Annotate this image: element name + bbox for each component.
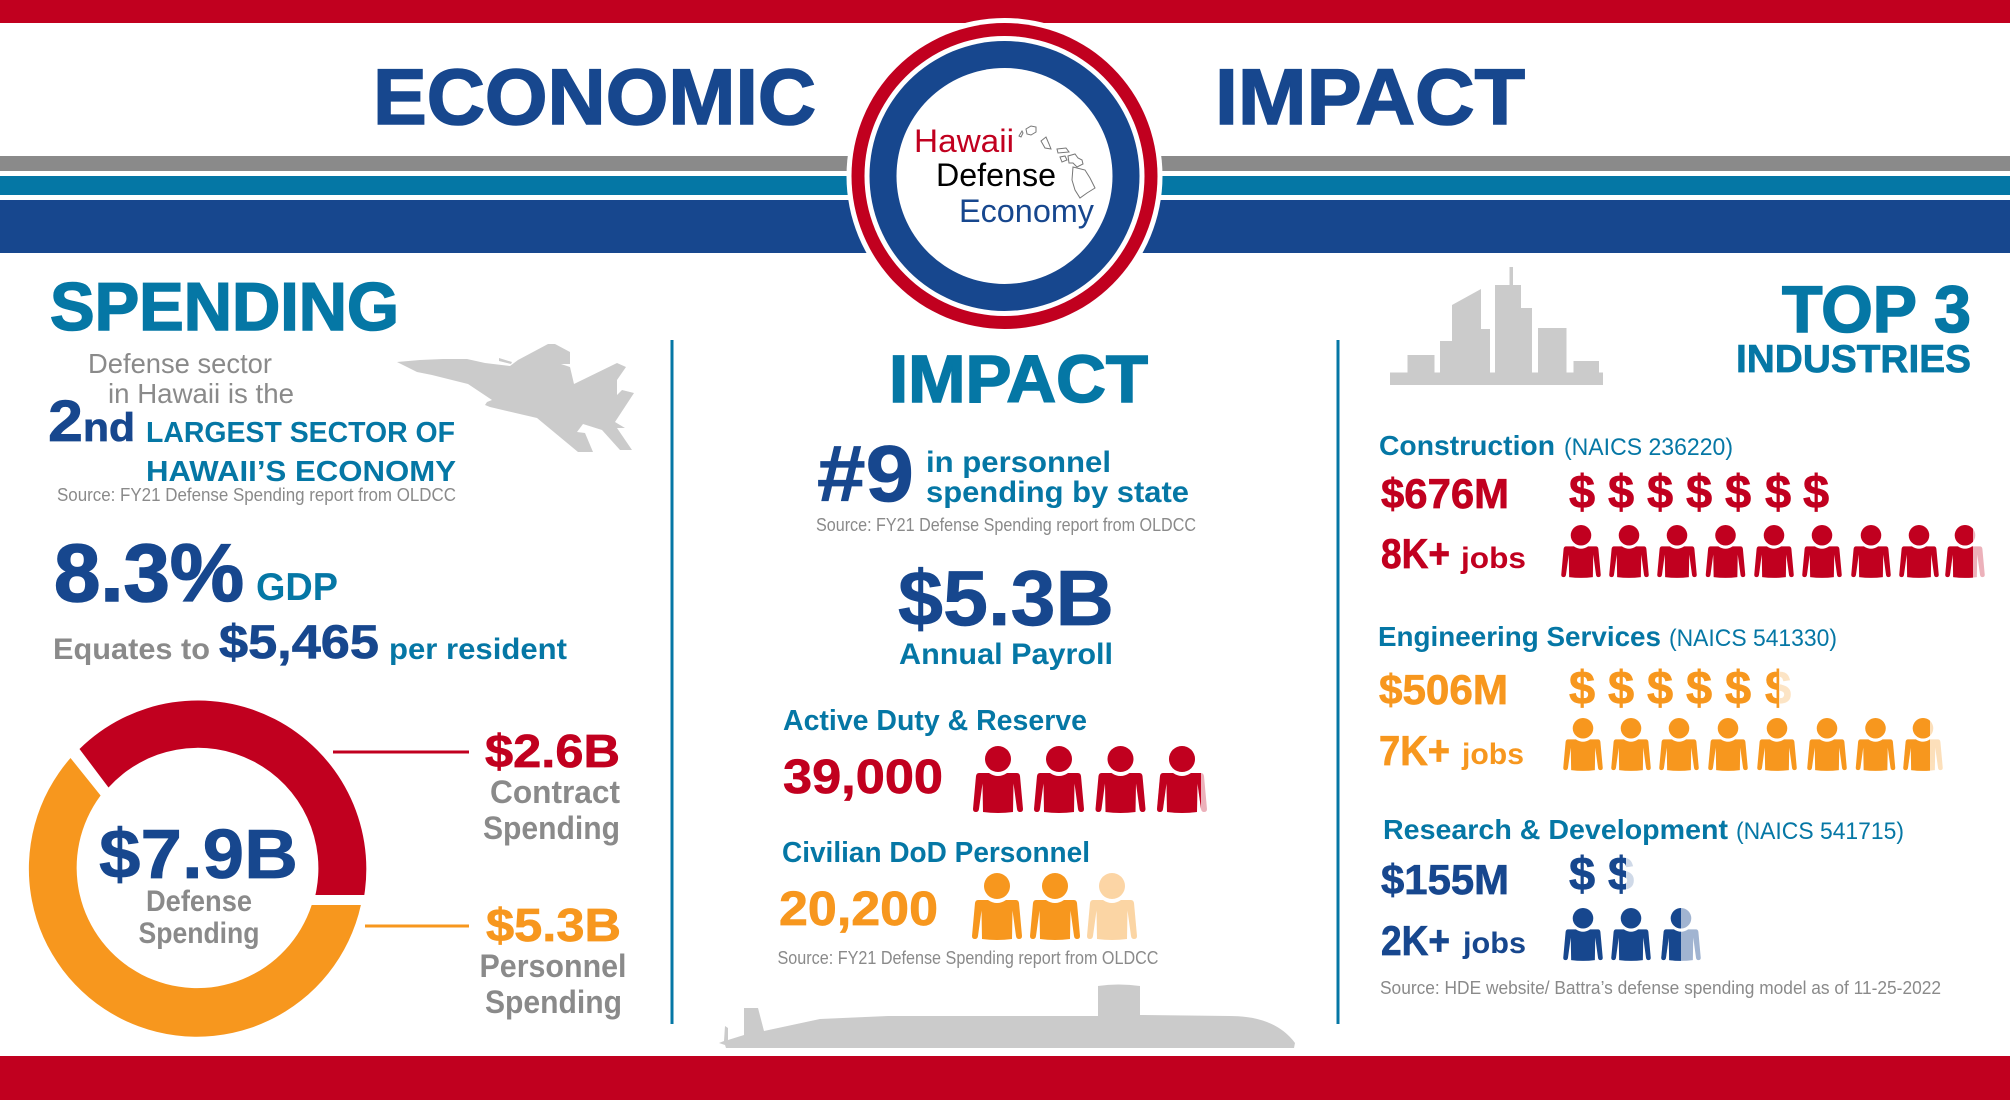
- text: largest sector of: LARGEST SECTOR OF: [146, 417, 455, 449]
- heading: spending: SPENDING: [50, 269, 399, 345]
- icons: active duty people: [973, 746, 1207, 813]
- label: annual payroll: Annual Payroll: [899, 638, 1113, 671]
- icons: dollars: [1569, 465, 1829, 518]
- label: research: Research & Development: [1383, 814, 1728, 845]
- panel: impact: [719, 342, 1295, 1048]
- icons: dollars: $: [1569, 661, 1595, 714]
- code: research: (NAICS 541715): [1736, 818, 1904, 845]
- icon: submarine: [719, 984, 1295, 1048]
- heading: industries: INDUSTRIES: [1736, 338, 1971, 381]
- heading: impact: IMPACT: [889, 342, 1148, 417]
- logo badge: [846, 18, 1162, 334]
- icons: people: [1563, 908, 1701, 961]
- text: in hawaii is the: in Hawaii is the: [108, 378, 294, 409]
- heading: top 3: TOP 3: [1782, 272, 1971, 346]
- stat: per resident amount: $5,465: [219, 615, 379, 668]
- label: personnel spending: Spending: [485, 984, 622, 1020]
- bottom red band: [0, 1056, 2010, 1100]
- icons: dollars: [1569, 854, 1634, 894]
- icons: people: [1561, 525, 1985, 578]
- text: equates to: Equates to: [53, 633, 210, 666]
- value: research: $155M: [1381, 856, 1509, 903]
- label: jobs: jobs: [1460, 542, 1526, 575]
- icons: civilian people: [972, 873, 1137, 940]
- label: civilian: Civilian DoD Personnel: [782, 837, 1090, 869]
- value: construction: $676M: [1381, 470, 1509, 517]
- stat: gdp percent: 8.3%: [54, 528, 244, 619]
- value: contract: $2.6B: [485, 725, 620, 777]
- text: per resident: per resident: [389, 633, 567, 666]
- donut chart: [29, 700, 366, 1037]
- icons: dollars: $: [1765, 465, 1791, 518]
- label: engineering: Engineering Services: [1378, 621, 1661, 652]
- logo text: Hawaii: Hawaii: [914, 123, 1014, 159]
- header stripes: [0, 156, 2010, 253]
- leader line: contract: [333, 750, 469, 754]
- label: contract: Contract: [490, 774, 620, 810]
- label: jobs: jobs: [1461, 738, 1524, 771]
- icons: dollars: $: [1608, 847, 1634, 900]
- source note: Source: FY21 Defense Spending report from OLDCC: [778, 948, 1158, 968]
- title: economic: ECONOMIC: [373, 52, 816, 141]
- icons: dollars: $: [1647, 661, 1673, 714]
- stat: 2nd: nd: [83, 406, 135, 450]
- stat: annual payroll: $5.3B: [898, 554, 1114, 642]
- text: spending by state: spending by state: [926, 476, 1189, 509]
- icons: dollars: $: [1608, 847, 1634, 900]
- industry: construction: [1379, 430, 1985, 578]
- icons: dollars: $: [1647, 465, 1673, 518]
- industry: research: [1381, 814, 1904, 964]
- stat: 2nd: [48, 389, 135, 454]
- text: in personnel: in personnel: [926, 446, 1111, 479]
- icon: city skyline: [1390, 267, 1603, 385]
- divider right: [1336, 340, 1340, 1024]
- icons: dollars: $: [1569, 465, 1595, 518]
- industry: engineering: [1378, 621, 1943, 774]
- icons: dollars: $: [1686, 465, 1712, 518]
- label: personnel: Personnel: [480, 948, 626, 984]
- icons: people: [1563, 718, 1943, 771]
- icons: dollars: $: [1686, 661, 1712, 714]
- value: jobs: 2K+: [1381, 917, 1450, 964]
- source note: Source: FY21 Defense Spending report from OLDCC: [57, 485, 456, 505]
- icons: dollars: $: [1765, 661, 1791, 714]
- panel: spending: [29, 269, 634, 1037]
- icons: dollars: $: [1569, 847, 1595, 900]
- donut center label 2: Spending: [138, 917, 260, 950]
- icons: dollars: $: [1725, 465, 1751, 518]
- top red band: [0, 0, 2010, 23]
- title: impact: IMPACT: [1215, 52, 1525, 141]
- value: jobs: 8K+: [1381, 530, 1450, 577]
- value: civilian: 20,200: [779, 883, 938, 936]
- icons: dollars: $: [1765, 661, 1791, 714]
- code: construction: (NAICS 236220): [1564, 434, 1733, 461]
- icons: dollars: $: [1803, 465, 1829, 518]
- leader line: personnel: [365, 924, 469, 928]
- icon: hawaiian islands: [1019, 126, 1095, 198]
- donut segment: personnel: [29, 758, 361, 1037]
- icon: fighter jet: [397, 344, 634, 452]
- label: construction: Construction: [1379, 430, 1555, 461]
- label: jobs: jobs: [1462, 927, 1526, 960]
- panel: top 3 industries: [1378, 267, 1985, 998]
- text: hawaii's economy: HAWAII’S ECONOMY: [146, 456, 456, 488]
- stat: rank: #9: [817, 429, 914, 518]
- icons: dollars: [1569, 668, 1791, 708]
- label: gdp: GDP: [256, 566, 338, 609]
- donut segment: contract: [80, 700, 366, 895]
- donut center label: Defense: [146, 885, 252, 918]
- icons: dollars: $: [1608, 661, 1634, 714]
- source note: Source: FY21 Defense Spending report from OLDCC: [816, 515, 1196, 535]
- value: engineering: $506M: [1379, 666, 1508, 713]
- logo text: Defense: Defense: [936, 157, 1056, 193]
- stat: 2nd: 2: [48, 389, 83, 454]
- source note: Source: HDE website/ Battra’s defense spending model as of 11-25-2022: [1380, 978, 1941, 998]
- logo text: Economy: Economy: [959, 193, 1094, 229]
- icons: dollars: $: [1725, 661, 1751, 714]
- label: active duty: Active Duty & Reserve: [783, 705, 1087, 737]
- value: jobs: 7K+: [1379, 727, 1450, 774]
- text: defense sector: Defense sector: [88, 348, 272, 379]
- value: personnel: $5.3B: [486, 899, 621, 951]
- code: engineering: (NAICS 541330): [1669, 625, 1837, 652]
- divider left: [670, 340, 674, 1024]
- icons: dollars: $: [1608, 465, 1634, 518]
- donut center value: $7.9B: [99, 815, 298, 893]
- label: contract spending: Spending: [483, 810, 620, 846]
- value: active duty: 39,000: [783, 751, 943, 804]
